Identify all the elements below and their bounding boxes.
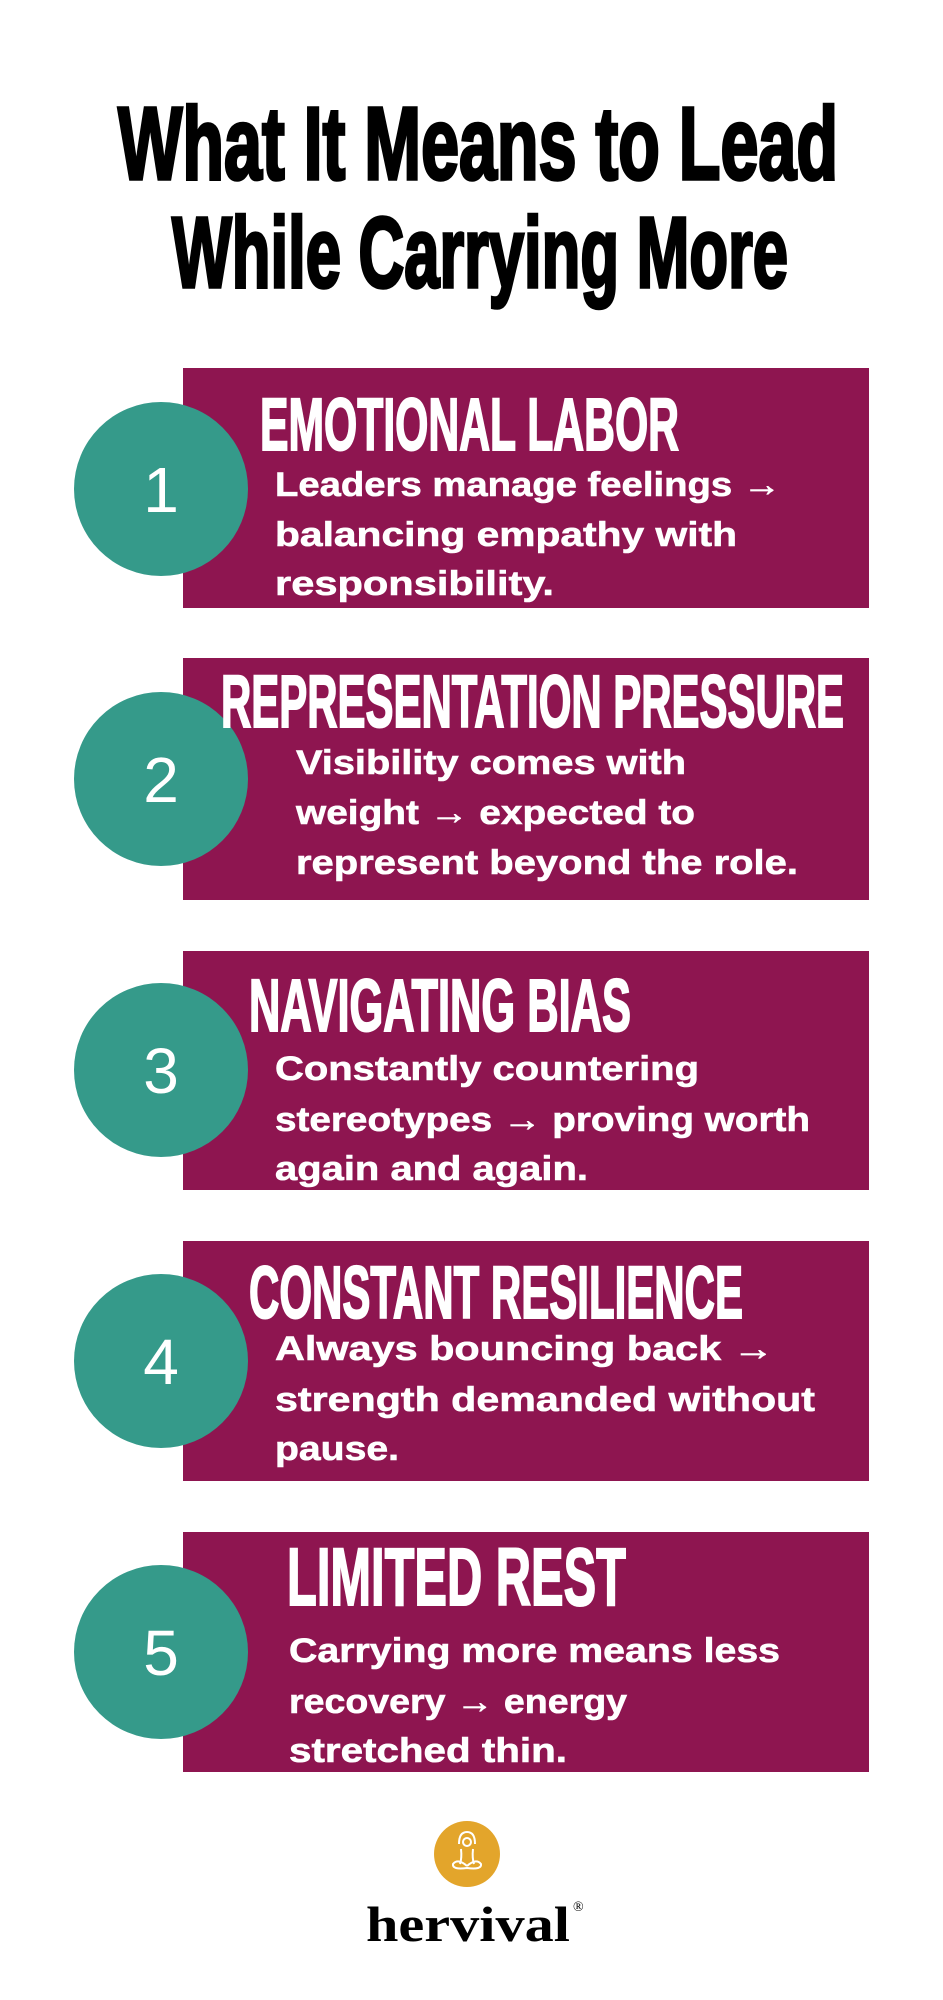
text: bias body: stereotypes → proving worth <box>275 1101 810 1139</box>
text: representation body <box>295 744 798 882</box>
brand name: hervival <box>366 1896 570 1952</box>
text: bias body: Constantly countering <box>275 1050 699 1088</box>
text: rest body: stretched thin. <box>289 1732 567 1770</box>
icon: number 2 circle: 2 <box>143 744 179 816</box>
text: resilience body: Always bouncing back → <box>275 1330 774 1368</box>
panel: representation pressure <box>74 658 869 900</box>
logo: ® <box>573 1900 584 1915</box>
icon: number 3 circle <box>74 983 248 1157</box>
text: bias body: again and again. <box>275 1150 588 1188</box>
panel: emotional labor <box>74 368 869 608</box>
heading: limited rest: LIMITED REST <box>287 1532 626 1623</box>
text: rest body: Carrying more means less <box>289 1632 780 1670</box>
icon: yoga figure <box>434 1821 500 1887</box>
icon: number 4 circle <box>74 1274 248 1448</box>
text: resilience body: strength demanded without <box>275 1381 815 1419</box>
text: emotional labor body <box>275 466 781 603</box>
heading: navigating bias: NAVIGATING BIAS <box>249 964 631 1047</box>
text: resilience body: pause. <box>275 1430 399 1468</box>
text: emotional labor body: Leaders manage feelings → <box>275 466 781 504</box>
text: representation body: weight → expected to <box>295 794 695 832</box>
icon: number 5 circle <box>74 1565 248 1739</box>
text: representation body: represent beyond the role. <box>296 844 798 882</box>
icon: number 1 circle <box>74 402 248 576</box>
icon: number 2 circle <box>74 692 248 866</box>
text: rest body: recovery → energy <box>289 1683 627 1721</box>
text: bias body <box>275 1050 810 1188</box>
text: rest body <box>289 1632 780 1770</box>
logo <box>366 1821 584 1952</box>
text: emotional labor body: balancing empathy with <box>275 516 737 554</box>
panel: limited rest <box>74 1532 869 1772</box>
icon: number 4 circle: 4 <box>143 1326 179 1398</box>
text: emotional labor body: responsibility. <box>275 565 554 603</box>
icon: number 1 circle: 1 <box>143 454 179 526</box>
panel: navigating bias <box>74 951 869 1190</box>
text: resilience body <box>275 1330 815 1468</box>
title <box>118 86 838 309</box>
icon: number 5 circle: 5 <box>143 1617 179 1689</box>
panel: constant resilience <box>74 1241 869 1481</box>
text: representation body: Visibility comes with <box>296 744 686 782</box>
icon: number 3 circle: 3 <box>143 1035 179 1107</box>
